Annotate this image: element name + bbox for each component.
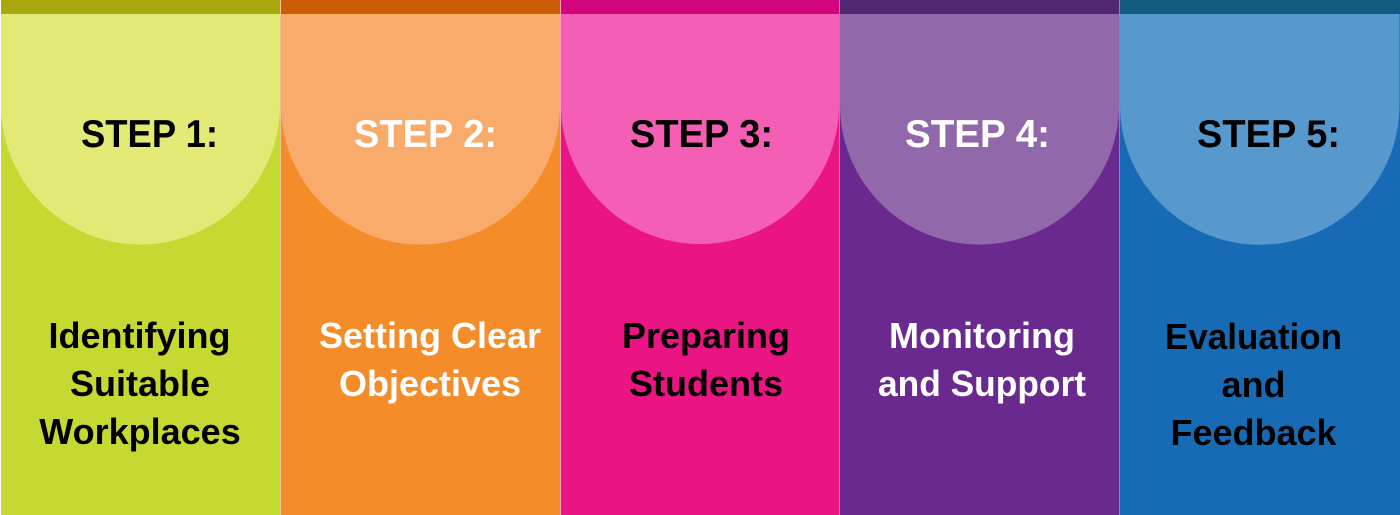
description: step 3: Preparing: [622, 315, 790, 356]
header band: step 5: [1120, 0, 1400, 14]
description: step 1: Workplaces: [39, 411, 241, 452]
panel: step 5: [1120, 0, 1400, 515]
description: step 1: Suitable: [70, 363, 210, 404]
header band: step 4: [840, 0, 1119, 14]
panel: step 3: [561, 0, 839, 515]
header band: step 2: [281, 0, 560, 14]
description: step 3: Students: [629, 363, 783, 404]
step label: step 2: STEP 2:: [354, 113, 497, 156]
header band: step 1: [1, 0, 280, 14]
description lines 2 and 3: step 5: and: [1221, 364, 1286, 405]
semicircle: step 2: [281, 14, 560, 244]
description: step 1: Identifying: [48, 315, 230, 356]
header band: step 3: [561, 0, 839, 14]
panel: step 1: [1, 0, 280, 515]
step label: step 5: STEP 5:: [1197, 113, 1340, 156]
step label: step 3: STEP 3:: [630, 113, 773, 156]
description: step 2: Setting Clear: [319, 315, 541, 356]
semicircle: step 3: [561, 14, 839, 244]
step label: step 4: STEP 4:: [905, 113, 1050, 156]
semicircle: step 4: [840, 14, 1119, 244]
panel: step 2: [281, 0, 560, 515]
semicircle: step 5: [1120, 14, 1400, 245]
semicircle: step 1: [1, 14, 280, 244]
description lines 2 and 3: step 5: Feedback: [1170, 412, 1338, 453]
step label: step 1: STEP 1:: [81, 113, 218, 156]
description: step 2: Objectives: [339, 363, 521, 404]
description line 2: step 4: and Support: [878, 363, 1086, 404]
panel: step 4: [840, 0, 1119, 515]
description: step 4: Monitoring: [889, 315, 1075, 356]
description: step 5: Evaluation: [1165, 316, 1342, 357]
